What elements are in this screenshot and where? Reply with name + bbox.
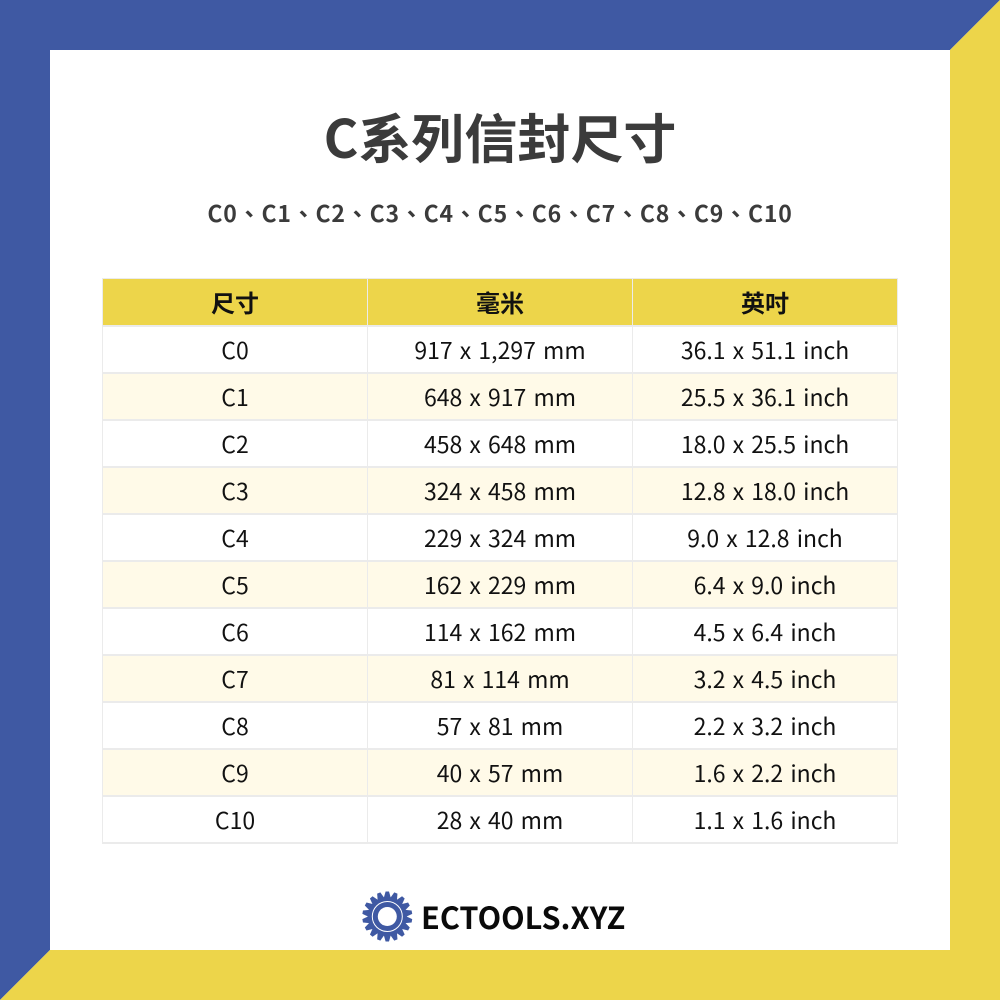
row C0: C0	[221, 332, 249, 366]
title: C系列信封尺寸	[324, 98, 676, 174]
brand name: ECTOOLS.XYZ	[421, 894, 625, 938]
row C8	[103, 703, 897, 748]
row C4: 229 x 324 mm	[424, 520, 576, 554]
row C2	[103, 421, 897, 466]
row C4	[103, 515, 897, 560]
row C5	[103, 562, 897, 607]
row C3: 324 x 458 mm	[424, 473, 576, 507]
icon: gear	[362, 892, 412, 942]
row C10	[103, 797, 897, 842]
row C7: C7	[221, 661, 249, 695]
row C6: C6	[221, 614, 249, 648]
row C5: 6.4 x 9.0 inch	[694, 567, 836, 601]
row C3	[103, 468, 897, 513]
row C4: 9.0 x 12.8 inch	[687, 520, 843, 554]
row C8: C8	[221, 708, 249, 742]
row C8: 57 x 81 mm	[437, 708, 563, 742]
row C9: 40 x 57 mm	[437, 755, 563, 789]
row C0: 36.1 x 51.1 inch	[681, 332, 849, 366]
row C7: 3.2 x 4.5 inch	[694, 661, 836, 695]
row C0: 917 x 1,297 mm	[414, 332, 586, 366]
row C10: C10	[215, 802, 255, 836]
row C9: 1.6 x 2.2 inch	[694, 755, 836, 789]
row C3: 12.8 x 18.0 inch	[681, 473, 849, 507]
table header row: 尺寸	[211, 284, 259, 319]
table header row	[103, 279, 897, 325]
row C7	[103, 656, 897, 701]
row C7: 81 x 114 mm	[430, 661, 570, 695]
row C0	[103, 327, 897, 372]
row C5: 162 x 229 mm	[424, 567, 576, 601]
table header row: 英吋	[741, 284, 789, 319]
row C2: 18.0 x 25.5 inch	[681, 426, 849, 460]
row C3: C3	[221, 473, 249, 507]
subtitle: list of sizes: C0、C1、C2、C3、C4、C5、C6、C7、C8、C9、C10	[207, 195, 793, 229]
row C1: C1	[221, 379, 249, 413]
row C4: C4	[221, 520, 249, 554]
row C6: 114 x 162 mm	[424, 614, 576, 648]
row C1: 648 x 917 mm	[424, 379, 576, 413]
row C2: 458 x 648 mm	[424, 426, 576, 460]
row C8: 2.2 x 3.2 inch	[694, 708, 836, 742]
row C6: 4.5 x 6.4 inch	[694, 614, 836, 648]
brand logo	[362, 892, 625, 942]
table header row: 毫米	[476, 284, 524, 319]
size table	[102, 278, 898, 844]
row C1: 25.5 x 36.1 inch	[681, 379, 849, 413]
row C6	[103, 609, 897, 654]
row C5: C5	[221, 567, 249, 601]
row C1	[103, 374, 897, 419]
row C2: C2	[221, 426, 249, 460]
row C10: 28 x 40 mm	[437, 802, 563, 836]
row C9: C9	[221, 755, 249, 789]
row C9	[103, 750, 897, 795]
row C10: 1.1 x 1.6 inch	[694, 802, 836, 836]
